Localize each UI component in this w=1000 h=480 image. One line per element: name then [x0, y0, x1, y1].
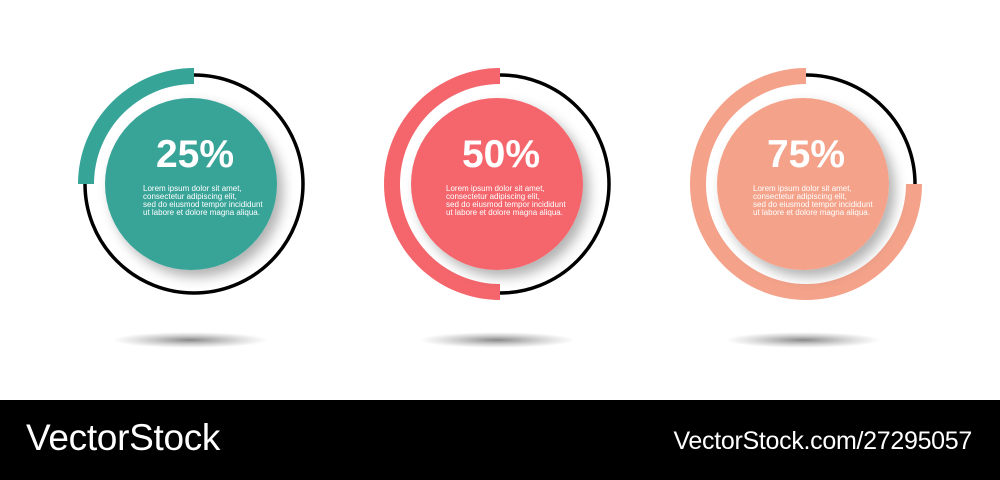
footer url: VectorStock.com/27295057	[673, 427, 972, 455]
ring: 50%: Lorem ipsum dolor sit amet,	[446, 184, 545, 193]
ring: 25%	[78, 68, 303, 348]
ring: 25%: consectetur adipiscing elit,	[143, 192, 237, 201]
ring: 50%: ut labore et dolore magna aliqua.	[446, 208, 563, 217]
footer bar	[0, 400, 1000, 480]
ring: 50%: sed do eiusmod tempor incididunt	[446, 200, 566, 209]
ring: 25%: Lorem ipsum dolor sit amet,	[143, 184, 242, 193]
footer logo text: VectorStock	[26, 417, 220, 458]
ring: 75%: 75%	[767, 133, 845, 176]
ring: 50%	[384, 68, 609, 348]
ring: 75%: ut labore et dolore magna aliqua.	[753, 208, 870, 217]
ring: 75%	[690, 68, 922, 348]
ring: 75%: consectetur adipiscing elit,	[753, 192, 847, 201]
ring: 25%: sed do eiusmod tempor incididunt	[143, 200, 263, 209]
ring: 50%: 50%	[462, 133, 540, 176]
ring: 25%: ut labore et dolore magna aliqua.	[143, 208, 260, 217]
ring: 75%: sed do eiusmod tempor incididunt	[753, 200, 873, 209]
ring: 25%: 25%	[156, 133, 234, 176]
ring: 75%: Lorem ipsum dolor sit amet,	[753, 184, 852, 193]
ring: 50%: consectetur adipiscing elit,	[446, 192, 540, 201]
